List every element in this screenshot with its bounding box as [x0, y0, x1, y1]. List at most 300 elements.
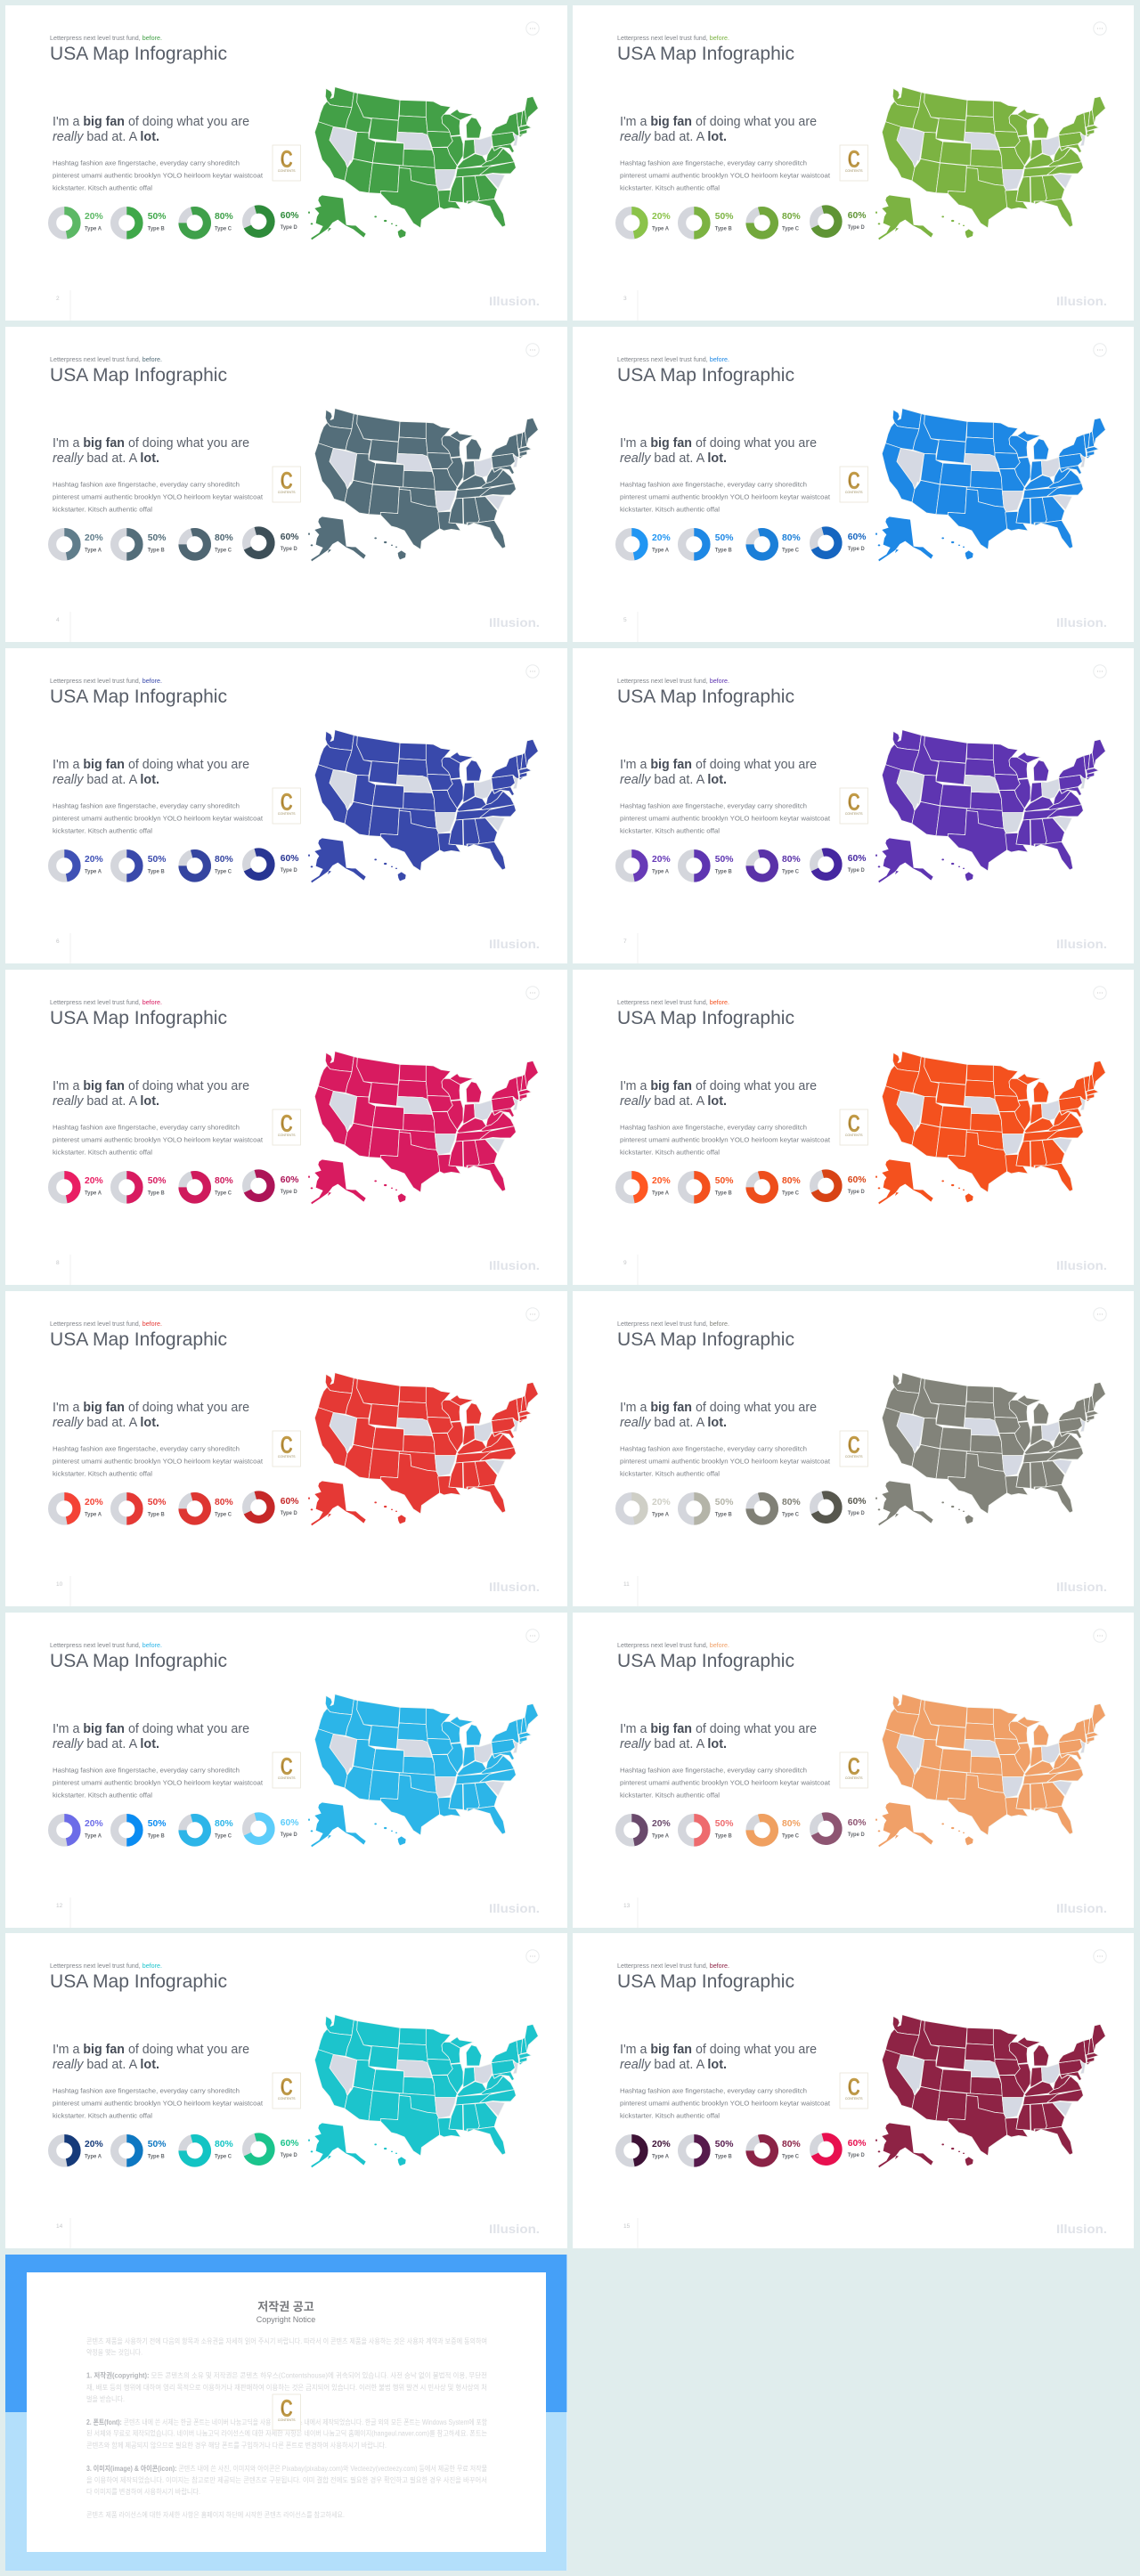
donut: Type A	[53, 2139, 103, 2163]
body text: kickstarter. Kitsch authentic offal	[620, 2112, 720, 2120]
heading	[53, 435, 249, 466]
logo badge: CONTENTS	[845, 169, 863, 173]
page number: 12	[56, 1902, 63, 1909]
donut: Type C: Type C	[215, 1511, 232, 1517]
body text: kickstarter. Kitsch authentic offal	[53, 183, 152, 192]
donut: Type C: Type C	[215, 868, 232, 874]
section 2 font: 된 서체와 무료로 제작되었습니다. 네이버 나눔고딕 라이선스에 대한 자세한 사항은 네이버 나눔고딕 홈페이지(hangeul.naver.com)를 참고하세요. 폰트는	[86, 2429, 487, 2438]
page number	[623, 290, 638, 321]
logo badge	[840, 1752, 867, 1788]
body text: Hashtag fashion axe fingerstache, everyday carry shoreditch	[53, 158, 240, 167]
page number: 15	[623, 2223, 630, 2230]
donut: Type C: Type C	[782, 547, 799, 553]
heading: I'm a big fan of doing what you are	[53, 1400, 249, 1415]
donut: Type D: Type D	[847, 2152, 865, 2158]
donut: Type B: 50%	[148, 854, 167, 865]
donut: Type C: Type C	[215, 1190, 232, 1196]
panel: warm grey slide	[573, 1291, 1134, 1606]
donut: Type A	[53, 1174, 103, 1199]
donut: Type C: Type C	[782, 868, 799, 874]
donut: Type B: Type B	[148, 2154, 165, 2160]
panel: teal slide	[5, 1933, 566, 2248]
logo badge: CONTENTS	[845, 812, 863, 816]
logo badge	[273, 1431, 301, 1467]
section 1 copyright: 벌을 받습니다.	[86, 2394, 125, 2403]
page number: 6	[56, 939, 60, 945]
title: USA Map Infographic	[50, 364, 227, 386]
heading: I'm a big fan of doing what you are	[53, 757, 249, 772]
heading: I'm a big fan of doing what you are	[620, 114, 817, 129]
logo badge: CONTENTS	[845, 1455, 863, 1459]
donut: Type D	[244, 528, 299, 557]
donut: Type C: 80%	[782, 854, 801, 865]
section 1 copyright: 재, 배포 등의 행위에 대하여 영리 목적으로 이용하거나 재판매하여 이용하는 것은 금지되어 있습니다. 이러한 불법 행위 발견 시 민사상 및 형사상의 처	[86, 2383, 487, 2392]
body text	[53, 801, 264, 834]
donut: Type D: 60%	[281, 2138, 299, 2149]
heading: really bad at. A lot.	[53, 129, 159, 144]
donut: Type D	[810, 207, 867, 236]
page number: 13	[623, 1902, 630, 1909]
donut: Type D: 60%	[847, 210, 867, 221]
donut: Type C: 80%	[782, 1497, 801, 1507]
USA map	[308, 1372, 538, 1525]
body text	[53, 480, 264, 513]
panel: lime slide	[573, 5, 1134, 321]
logo badge: CONTENTS	[278, 1776, 296, 1779]
section 3 image and icon: 3. 이미지(image) & 아이콘(icon): 콘텐츠 내에 쓴 사진, 이미지와 아이콘은 Pixabay(pixabay.com)와 Vecteezy(vecteezy.com) 등에서 제공한 무료 저작물	[86, 2464, 487, 2473]
body text	[620, 2087, 831, 2120]
icon: menu circle	[1093, 22, 1106, 35]
panel: purple slide	[573, 648, 1134, 963]
logo badge	[840, 2073, 867, 2109]
donut: Type C	[747, 1815, 801, 1845]
intro paragraph: 콘텐츠 제품을 사용하기 전에 다음의 항목과 소유권을 자세히 읽어 주시기 바랍니다. 따라서 이 콘텐츠 제품을 사용하는 것은 사용자 계약과 보증에 동의하여	[86, 2336, 487, 2345]
donut: Type D: Type D	[847, 546, 865, 552]
donut: Type C	[747, 2136, 801, 2166]
donut: Type B: 50%	[148, 1175, 167, 1186]
heading	[620, 435, 817, 466]
donut: Type B: 50%	[714, 1818, 734, 1829]
body text	[620, 480, 831, 513]
subtitle: Letterpress next level trust fund, before.	[617, 1962, 729, 1970]
donut: Type B: Type B	[714, 547, 732, 553]
donut: Type D: 60%	[847, 532, 867, 542]
donut: Type B: Type B	[714, 226, 732, 232]
light blue background bottom	[5, 2412, 566, 2571]
body text	[53, 1766, 264, 1799]
donut: Type C: 80%	[215, 1497, 233, 1507]
donut: Type C	[180, 208, 233, 238]
page number	[56, 933, 70, 963]
heading: I'm a big fan of doing what you are	[620, 1078, 817, 1093]
donut: Type C: 80%	[215, 211, 233, 222]
donut: Type B: Type B	[148, 1832, 165, 1839]
logo badge: C	[281, 1431, 293, 1459]
panel: orange slide	[573, 970, 1134, 1285]
donut: Type D: Type D	[847, 1510, 865, 1516]
donut: Type A: Type A	[652, 868, 669, 874]
body text: pinterest umami authentic brooklyn YOLO heirloom keytar waistcoat	[620, 814, 831, 822]
heading	[620, 757, 817, 787]
heading: really bad at. A lot.	[620, 2057, 727, 2072]
page number: 9	[623, 1260, 627, 1266]
donut: Type A	[619, 2139, 671, 2163]
USA map	[308, 87, 538, 240]
logo badge: C	[281, 2073, 293, 2101]
donut: Type B: Type B	[714, 1190, 732, 1196]
title: USA Map Infographic	[617, 686, 794, 707]
heading: really bad at. A lot.	[53, 451, 159, 466]
body text	[53, 158, 264, 192]
heading: I'm a big fan of doing what you are	[53, 1078, 249, 1093]
panel: red slide	[5, 1291, 566, 1606]
USA map	[875, 409, 1105, 561]
icon: menu circle	[526, 1950, 539, 1963]
brand: Illusion.	[489, 2222, 540, 2236]
heading	[620, 2042, 817, 2072]
donut: Type C: Type C	[215, 1832, 232, 1839]
heading	[53, 1720, 249, 1751]
subtitle: Letterpress next level trust fund, before.	[50, 677, 162, 685]
brand: Illusion.	[1056, 615, 1107, 630]
donut: Type D: Type D	[281, 546, 297, 552]
heading: I'm a big fan of doing what you are	[53, 2042, 249, 2057]
donut: Type B	[115, 211, 167, 235]
logo badge: C	[847, 1431, 859, 1459]
donut: Type A	[619, 1496, 671, 1521]
body text: kickstarter. Kitsch authentic offal	[53, 1791, 152, 1799]
body text: pinterest umami authentic brooklyn YOLO heirloom keytar waistcoat	[53, 1457, 264, 1465]
body text: kickstarter. Kitsch authentic offal	[620, 1148, 720, 1156]
donut: Type D	[244, 849, 299, 879]
donut: Type C: Type C	[215, 547, 232, 553]
donut: Type A: 20%	[652, 854, 671, 865]
body text: Hashtag fashion axe fingerstache, everyday carry shoreditch	[53, 1444, 240, 1452]
panel: slate slide	[5, 327, 566, 642]
donut: Type B	[681, 211, 734, 235]
logo badge: C	[847, 1752, 859, 1779]
brand: Illusion.	[1056, 937, 1107, 951]
section 3 image and icon: 다 이미지를 변경하여 사용하시기 바랍니다.	[86, 2487, 200, 2496]
icon: menu circle	[526, 22, 539, 35]
donut: Type A: Type A	[85, 2154, 102, 2160]
donut: Type B: 50%	[714, 854, 734, 865]
closing line: 콘텐츠 제품 라이선스에 대한 자세한 사항은 홈페이지 하단에 시작한 콘텐츠 라이선스를 참고하세요.	[86, 2510, 345, 2519]
donut: Type C: 80%	[215, 2139, 233, 2149]
body text: Hashtag fashion axe fingerstache, everyday carry shoreditch	[53, 480, 240, 488]
USA map	[875, 1694, 1105, 1847]
body text: pinterest umami authentic brooklyn YOLO heirloom keytar waistcoat	[620, 1135, 831, 1143]
logo badge: C	[281, 1109, 293, 1137]
donut: Type B: Type B	[714, 2154, 732, 2160]
panel: peach slide	[573, 1612, 1134, 1927]
icon: menu circle	[526, 665, 539, 678]
heading	[53, 1078, 249, 1109]
heading	[53, 1400, 249, 1430]
donut: Type D	[810, 1492, 867, 1522]
page number: 7	[623, 939, 627, 945]
body text: Hashtag fashion axe fingerstache, everyday carry shoreditch	[620, 2087, 807, 2095]
donut: Type D	[244, 1492, 299, 1522]
subtitle: Letterpress next level trust fund, before.	[50, 355, 162, 363]
donut: Type A	[619, 853, 671, 878]
section 1 copyright	[86, 2371, 487, 2403]
donut: Type C	[747, 1493, 801, 1524]
logo badge	[273, 145, 301, 181]
body text: Hashtag fashion axe fingerstache, everyday carry shoreditch	[53, 801, 240, 809]
donut: Type D	[244, 1171, 299, 1200]
donut: Type D: 60%	[847, 1174, 867, 1185]
donut: Type B: 50%	[714, 2139, 734, 2149]
donut: Type A: Type A	[85, 226, 102, 232]
subtitle: Letterpress next level trust fund, before.	[50, 34, 162, 42]
donut: Type A: 20%	[85, 532, 103, 543]
heading: I'm a big fan of doing what you are	[53, 435, 249, 451]
USA map	[875, 2015, 1105, 2168]
heading	[53, 757, 249, 787]
donut: Type C: 80%	[782, 532, 801, 543]
donut: Type C	[747, 529, 801, 559]
donut: Type D: 60%	[847, 1496, 867, 1507]
panel: sky blue slide	[5, 1612, 566, 1927]
logo badge: CONTENTS	[845, 1776, 863, 1779]
heading	[620, 1400, 817, 1430]
subtitle: Letterpress next level trust fund, before.	[617, 355, 729, 363]
USA map	[308, 729, 538, 882]
body text: pinterest umami authentic brooklyn YOLO heirloom keytar waistcoat	[53, 2100, 264, 2108]
heading: really bad at. A lot.	[620, 772, 727, 787]
donut: Type D: Type D	[847, 224, 865, 231]
heading: I'm a big fan of doing what you are	[620, 2042, 817, 2057]
body text: Hashtag fashion axe fingerstache, everyday carry shoreditch	[620, 1766, 807, 1774]
logo badge: CONTENTS	[278, 491, 296, 494]
title: USA Map Infographic	[50, 1329, 227, 1350]
logo badge: C	[281, 467, 293, 494]
panel: burgundy slide	[573, 1933, 1134, 2248]
donut: Type D: 60%	[281, 853, 299, 864]
donut: Type B: 50%	[148, 211, 167, 222]
donut: Type A: 20%	[85, 1497, 103, 1507]
donut: Type A: 20%	[85, 1818, 103, 1829]
donut: Type B: Type B	[148, 547, 165, 553]
donut: Type C	[180, 1493, 233, 1524]
donut: Type C: 80%	[782, 2139, 801, 2149]
body text: pinterest umami authentic brooklyn YOLO heirloom keytar waistcoat	[620, 1457, 831, 1465]
panel: copyright notice	[5, 2255, 566, 2571]
section 2 font	[86, 2418, 488, 2450]
donut: Type A: 20%	[652, 1175, 671, 1186]
donut: Type A: Type A	[652, 2154, 669, 2160]
donut: Type B	[115, 532, 167, 557]
donut: Type C: 80%	[215, 1175, 233, 1186]
donut: Type B	[115, 2139, 167, 2163]
logo badge: C	[281, 2394, 293, 2422]
donut: Type B: Type B	[148, 226, 165, 232]
donut: Type A: 20%	[652, 532, 671, 543]
brand: Illusion.	[1056, 1580, 1107, 1594]
body text	[620, 801, 831, 834]
donut: Type A: Type A	[652, 1511, 669, 1517]
donut: Type B	[115, 1496, 167, 1521]
donut: Type A: Type A	[85, 1190, 102, 1196]
subtitle: Letterpress next level trust fund, before.	[617, 998, 729, 1006]
subtitle: Letterpress next level trust fund, before.	[50, 1962, 162, 1970]
USA map	[875, 87, 1105, 240]
donut: Type B: Type B	[148, 1190, 165, 1196]
donut: Type C: Type C	[782, 1832, 799, 1839]
logo badge: C	[847, 145, 859, 173]
title: USA Map Infographic	[50, 1971, 227, 1992]
heading: really bad at. A lot.	[53, 2057, 159, 2072]
page number: 14	[56, 2223, 63, 2230]
logo badge: CONTENTS	[278, 2418, 296, 2422]
heading: I'm a big fan of doing what you are	[620, 757, 817, 772]
heading: really bad at. A lot.	[620, 129, 727, 144]
donut: Type D: 60%	[281, 1496, 299, 1507]
donut: Type A: 20%	[652, 2139, 671, 2149]
donut: Type D: 60%	[281, 532, 299, 542]
donut: Type B	[681, 1174, 734, 1199]
donut: Type B	[115, 1817, 167, 1841]
notice subtitle: Copyright Notice	[256, 2315, 315, 2324]
donut: Type B: 50%	[714, 211, 734, 222]
white notice card	[27, 2272, 546, 2552]
body text: kickstarter. Kitsch authentic offal	[53, 505, 152, 513]
logo badge	[273, 1109, 301, 1145]
body text: pinterest umami authentic brooklyn YOLO heirloom keytar waistcoat	[53, 1135, 264, 1143]
subtitle: Letterpress next level trust fund, before.	[617, 1320, 729, 1328]
USA map	[875, 1051, 1105, 1204]
donut: Type C: 80%	[782, 1175, 801, 1186]
panel: pink slide	[5, 970, 566, 1285]
logo badge: CONTENTS	[845, 491, 863, 494]
donut: Type B: 50%	[148, 1497, 167, 1507]
USA map	[875, 1372, 1105, 1525]
body text: pinterest umami authentic brooklyn YOLO heirloom keytar waistcoat	[53, 1778, 264, 1786]
body text	[620, 158, 831, 192]
donut: Type A: Type A	[652, 1832, 669, 1839]
icon: menu circle	[1093, 665, 1106, 678]
donut: Type D: Type D	[281, 1510, 297, 1516]
title: USA Map Infographic	[617, 1007, 794, 1028]
body text: Hashtag fashion axe fingerstache, everyday carry shoreditch	[620, 158, 807, 167]
donut: Type D: 60%	[281, 1174, 299, 1185]
title: USA Map Infographic	[617, 1329, 794, 1350]
USA map	[308, 1694, 538, 1847]
donut: Type B: 50%	[714, 1497, 734, 1507]
icon: menu circle	[526, 344, 539, 356]
icon: menu circle	[1093, 1629, 1106, 1642]
body text: kickstarter. Kitsch authentic offal	[53, 1469, 152, 1477]
logo badge	[273, 2073, 301, 2109]
logo badge	[273, 788, 301, 824]
logo badge	[840, 1109, 867, 1145]
body text	[53, 1123, 264, 1156]
title: USA Map Infographic	[617, 1649, 794, 1670]
body text	[620, 1766, 831, 1799]
donut: Type D	[810, 2134, 867, 2165]
logo badge	[840, 1431, 867, 1467]
body text: pinterest umami authentic brooklyn YOLO heirloom keytar waistcoat	[620, 492, 831, 500]
heading	[620, 1720, 817, 1751]
donut: Type B	[115, 853, 167, 878]
donut: Type A	[619, 1817, 671, 1841]
donut: Type D: 60%	[281, 1816, 299, 1827]
page number	[623, 1576, 638, 1606]
donut: Type D: Type D	[847, 1189, 865, 1195]
USA map	[308, 1051, 538, 1204]
page number: 2	[56, 296, 60, 302]
donut: Type D	[810, 1171, 867, 1200]
brand: Illusion.	[1056, 1258, 1107, 1272]
body text: pinterest umami authentic brooklyn YOLO heirloom keytar waistcoat	[620, 171, 831, 180]
donut: Type C: 80%	[215, 532, 233, 543]
heading: I'm a big fan of doing what you are	[620, 435, 817, 451]
donut: Type C: 80%	[215, 1818, 233, 1829]
logo badge: CONTENTS	[845, 1134, 863, 1137]
donut: Type A: Type A	[85, 1511, 102, 1517]
page number	[56, 1897, 70, 1927]
donut: Type A	[53, 1817, 103, 1841]
donut: Type C: Type C	[215, 226, 232, 232]
page number	[623, 612, 638, 642]
heading: I'm a big fan of doing what you are	[620, 1400, 817, 1415]
heading: I'm a big fan of doing what you are	[53, 1720, 249, 1736]
donut: Type D: 60%	[847, 853, 867, 864]
donut: Type A: Type A	[652, 547, 669, 553]
donut: Type A: 20%	[85, 854, 103, 865]
donut: Type C	[747, 208, 801, 238]
page number	[56, 612, 70, 642]
donut: Type B: 50%	[148, 2139, 167, 2149]
logo badge: CONTENTS	[278, 1134, 296, 1137]
intro paragraph: 약정을 맺는 것입니다.	[86, 2348, 142, 2357]
title: USA Map Infographic	[50, 1007, 227, 1028]
page number	[623, 1897, 638, 1927]
donut: Type D	[810, 1813, 867, 1843]
body text	[53, 2087, 264, 2120]
logo badge: CONTENTS	[278, 1455, 296, 1459]
donut: Type D: Type D	[281, 867, 297, 874]
body text	[53, 1444, 264, 1477]
body text	[620, 1123, 831, 1156]
heading: really bad at. A lot.	[53, 1736, 159, 1751]
page number	[623, 2218, 638, 2248]
logo badge: CONTENTS	[278, 2097, 296, 2101]
logo badge	[273, 2394, 301, 2430]
page number	[56, 2218, 70, 2248]
brand: Illusion.	[1056, 1900, 1107, 1914]
heading: really bad at. A lot.	[620, 1736, 727, 1751]
title: USA Map Infographic	[617, 1971, 794, 1992]
donut: Type D: 60%	[847, 1816, 867, 1827]
body text: Hashtag fashion axe fingerstache, everyday carry shoreditch	[53, 1123, 240, 1131]
panel: green slide	[5, 5, 566, 321]
donut: Type C: Type C	[782, 1190, 799, 1196]
icon: menu circle	[526, 1307, 539, 1321]
body text: Hashtag fashion axe fingerstache, everyday carry shoreditch	[53, 2087, 240, 2095]
logo badge: CONTENTS	[845, 2097, 863, 2101]
heading: really bad at. A lot.	[53, 1415, 159, 1430]
title: USA Map Infographic	[617, 364, 794, 386]
donut: Type D	[244, 207, 299, 236]
donut: Type C: Type C	[782, 2154, 799, 2160]
donut: Type D	[810, 849, 867, 879]
logo badge: CONTENTS	[278, 812, 296, 816]
donut: Type A	[53, 1496, 103, 1521]
body text: kickstarter. Kitsch authentic offal	[620, 1469, 720, 1477]
page number: 8	[56, 1260, 60, 1266]
